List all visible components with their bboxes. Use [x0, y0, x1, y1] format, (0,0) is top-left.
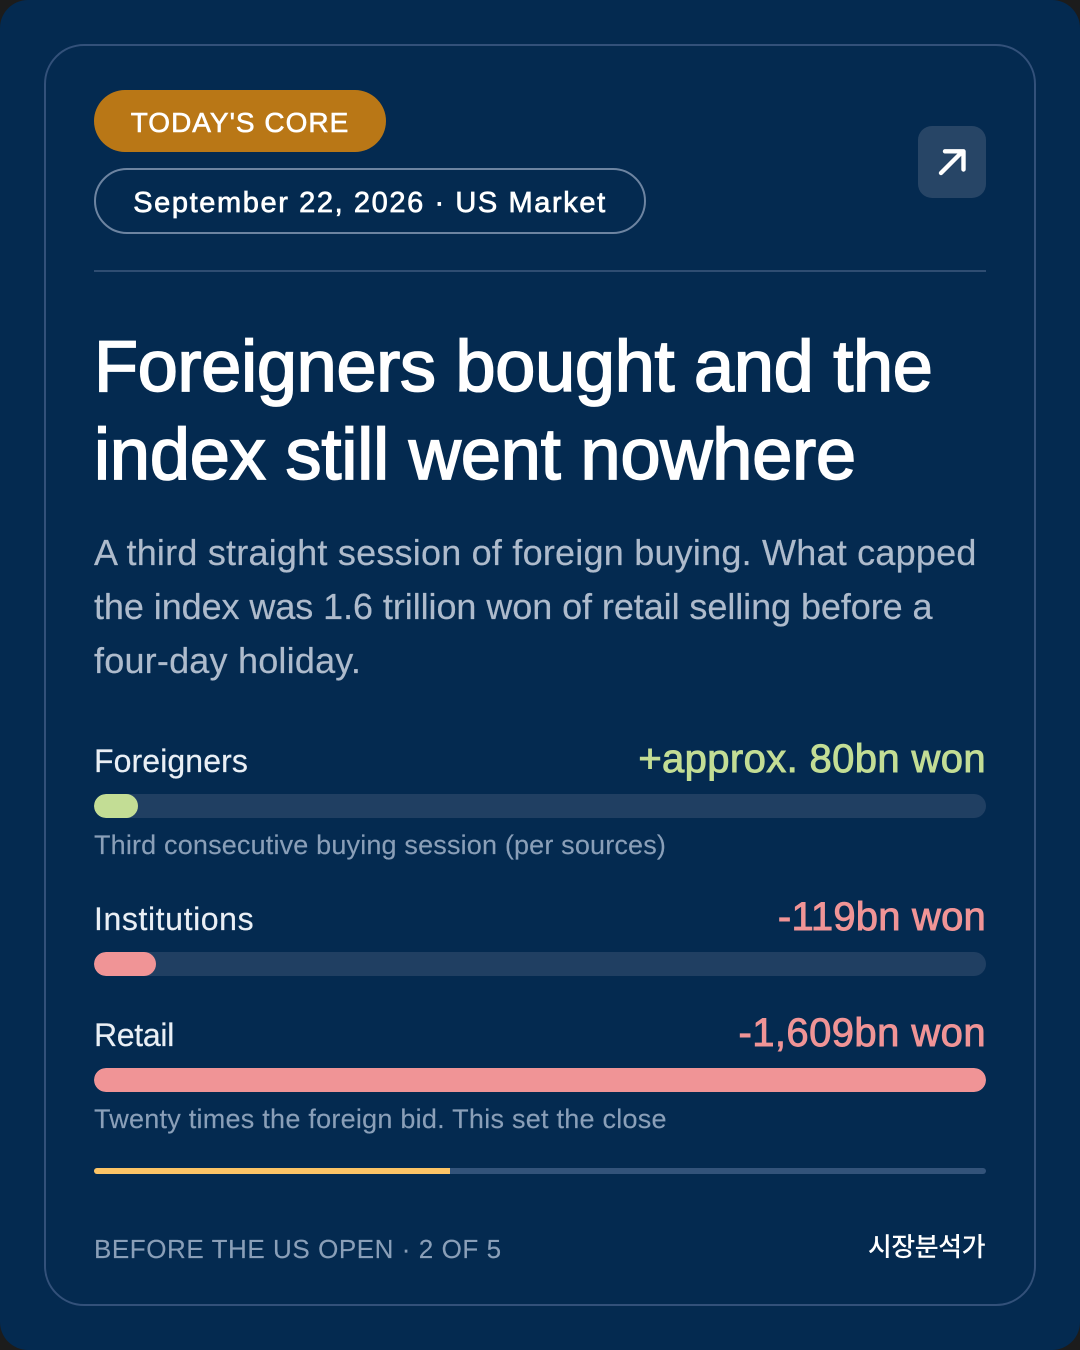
title — [94, 327, 933, 495]
label: foreigners: Foreigners — [94, 743, 248, 779]
bar: retail — [94, 1068, 986, 1092]
row: institutions — [94, 895, 986, 976]
label: institutions: Institutions — [94, 901, 254, 937]
value: institutions: -119bn won — [778, 895, 986, 939]
subtitle text block: four-day holiday. — [94, 640, 361, 681]
footer brand: 시장분석가 — [868, 1232, 985, 1262]
pill: date and market: September 22, 2026 · US Market — [133, 187, 607, 219]
row: retail — [94, 1011, 986, 1134]
subtitle text block: the index was 1.6 trillion won of retail selling before a — [94, 586, 932, 627]
pill: date and market — [94, 168, 646, 234]
footer text: BEFORE THE US OPEN · 2 OF 5 — [94, 1234, 502, 1264]
badge: today's core: TODAY'S CORE — [131, 107, 349, 138]
subtitle text block — [94, 532, 977, 681]
title: index still went nowhere — [94, 415, 856, 495]
bar: institutions — [94, 952, 986, 976]
row: foreigners — [94, 737, 986, 860]
divider — [94, 270, 986, 272]
value: retail: -1,609bn won — [738, 1011, 986, 1055]
bar: foreigners — [94, 794, 986, 818]
label: retail: Retail — [94, 1017, 174, 1053]
value: foreigners: +approx. 80bn won — [638, 737, 986, 781]
note: retail: Twenty times the foreign bid. This set the close — [94, 1104, 667, 1134]
note: foreigners: Third consecutive buying session (per sources) — [94, 830, 666, 860]
icon: arrow button — [918, 126, 986, 198]
title: Foreigners bought and the — [94, 327, 933, 407]
progress bar — [94, 1168, 986, 1174]
subtitle text block: A third straight session of foreign buying. What capped — [94, 532, 977, 573]
badge: today's core — [94, 90, 386, 152]
